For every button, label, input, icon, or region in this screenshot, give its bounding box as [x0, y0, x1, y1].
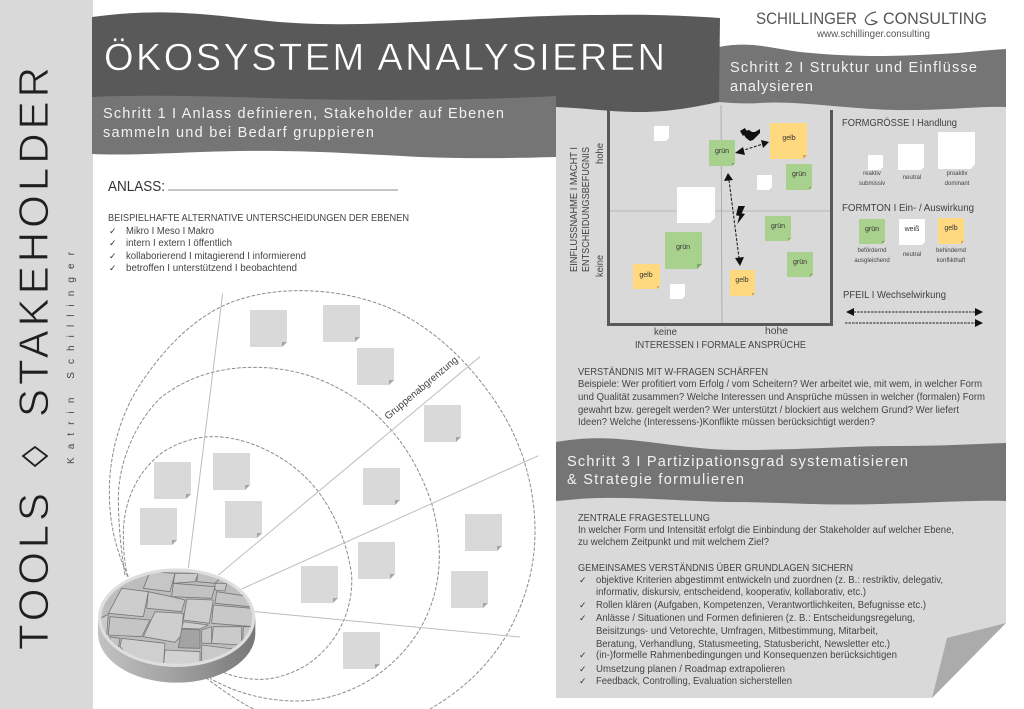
legend: arrows: PFEIL I Wechselwirkung — [843, 289, 946, 301]
legend: form size: proaktiv — [946, 171, 968, 177]
text block: common understanding checklist: Anlässe / Situationen und Formen definieren (z. B.: Entscheidungsregelung, — [596, 613, 915, 624]
heading text: Schritt 2 I Struktur und Einflüsse — [730, 60, 977, 76]
sidebar author: Katrin Schillinger — [66, 251, 77, 464]
text block: level distinctions: intern I extern I öffentlich — [126, 238, 232, 249]
text block: central question: zu welchem Zeitpunkt und mit welchem Ziel? — [578, 537, 769, 548]
chart: influence / interest matrix: grün — [715, 148, 729, 155]
chart: influence / interest matrix: grün — [793, 259, 807, 266]
legend: form colour: behindernd — [936, 248, 966, 254]
text block: level distinctions: BEISPIELHAFTE ALTERNATIVE UNTERSCHEIDUNGEN DER EBENEN — [108, 213, 409, 224]
legend: form colour: ausgleichend — [854, 258, 890, 264]
text block: central question — [578, 513, 954, 548]
text block: common understanding checklist: ✓ — [579, 665, 587, 675]
chart: influence / interest matrix: gelb — [639, 272, 653, 279]
legend: form colour: konflikthaft — [937, 258, 966, 264]
title text: ÖKOSYSTEM ANALYSIEREN — [104, 37, 665, 79]
sidebar title — [10, 67, 57, 650]
text block: common understanding checklist: Beisitzungs- und Vetorechte, Umfragen, Mitbestimmung, Mitarbeit, — [596, 626, 878, 637]
text block: level distinctions: Mikro I Meso I Makro — [126, 226, 214, 237]
legend: form size: neutral — [903, 175, 921, 181]
text block: W-Fragen: Beispiele: Wer profitiert vom Erfolg / vom Scheitern? Wer arbeitet wie, mit wem, in welcher Form — [578, 379, 982, 390]
text block: level distinctions — [108, 213, 409, 274]
text block: W-Fragen: VERSTÄNDNIS MIT W-FRAGEN SCHÄRFEN — [578, 366, 768, 378]
sidebar title: TOOLS — [10, 493, 57, 650]
heading text: Schritt 3 I Partizipationsgrad systematisieren — [567, 454, 908, 470]
text block: level distinctions: ✓ — [109, 252, 117, 262]
legend: arrows — [843, 289, 983, 327]
label: group boundary: Gruppenabgrenzung — [383, 355, 460, 422]
matrix sticky notes — [654, 126, 669, 141]
text block: central question: ZENTRALE FRAGESTELLUNG — [578, 513, 710, 524]
legend: form colour — [842, 202, 974, 264]
legend: form colour: gelb — [944, 225, 958, 232]
legend: form colour: befördernd — [857, 248, 887, 254]
chart: influence / interest matrix: gelb — [735, 277, 749, 284]
text block: level distinctions: ✓ — [109, 264, 117, 274]
chart: influence / interest matrix — [569, 105, 832, 351]
panel: right grey sheet with folded corner — [556, 100, 1006, 698]
text block: W-Fragen: und Qualität zusammen? Welche Interessen und Ansprüche müssen in welcher (formalen) Form — [578, 392, 985, 403]
chart: influence / interest matrix: gelb — [782, 135, 796, 142]
text block: common understanding checklist: ✓ — [579, 677, 587, 687]
legend: form colour: neutral — [903, 252, 921, 258]
chart: influence / interest matrix: hohe — [765, 326, 788, 337]
chart: influence / interest matrix: keine — [595, 255, 606, 277]
text block: common understanding checklist: informativ, diskursiv, entscheidend, kooperativ, kollaborativ, etc.) — [596, 587, 866, 598]
text block: level distinctions: betroffen I unterstützend I beobachtend — [126, 263, 297, 274]
anlass field: ANLASS: — [108, 179, 165, 195]
text block: common understanding checklist: ✓ — [579, 601, 587, 611]
banner: Schritt 3 — [556, 438, 1006, 505]
matrix frame — [608, 108, 832, 324]
chart: influence / interest matrix: grün — [676, 244, 690, 251]
text block: central question: In welcher Form und Intensität erfolgt die Einbindung der Stakeholder auf welcher Ebene, — [578, 525, 954, 536]
text block: common understanding checklist: ✓ — [579, 576, 587, 586]
legend: form colour: FORMTON I Ein- / Auswirkung — [842, 202, 974, 214]
logo: www.schillinger.consulting — [816, 29, 930, 40]
text block: common understanding checklist: ✓ — [579, 651, 587, 661]
legend: form colour: grün — [865, 226, 879, 233]
text block: common understanding checklist: objektive Kriterien abgestimmt entwickeln und zuordnen (z. B.: restriktiv, delegativ, — [596, 575, 943, 586]
icon: lightning — [736, 206, 745, 224]
text block: common understanding checklist: (in-)formelle Rahmenbedingungen und Konsequenzen berücksichtigen — [596, 650, 897, 661]
logo: CONSULTING — [883, 10, 987, 28]
chart: influence / interest matrix: grün — [771, 223, 785, 230]
legend: form size: FORMGRÖSSE I Handlung — [842, 117, 957, 129]
banner: Schritt 1 — [92, 96, 556, 158]
panel: left sidebar — [0, 0, 93, 709]
y axis labels: EINFLUSSNAHME I MACHT I — [569, 147, 580, 272]
legend: form size: submissiv — [859, 181, 885, 187]
icon: stone disc — [98, 568, 255, 683]
banner: Schritt 1: sammeln und bei Bedarf gruppieren — [103, 125, 374, 141]
logo — [756, 10, 987, 40]
text block: level distinctions: ✓ — [109, 239, 117, 249]
legend: form size: reaktiv — [863, 171, 881, 177]
text block: W-Fragen: Ideen? Welche (Interessens-)Konflikte müssen berücksichtigt werden? — [578, 417, 875, 428]
folded page corner — [932, 623, 1006, 698]
banner: Schritt 2 — [719, 45, 1006, 110]
banner: Schritt 2: analysieren — [730, 79, 813, 95]
icon: handshake — [740, 128, 760, 141]
text block: W-Fragen: gewahrt bzw. geregelt werden? Wer unterstützt / blockiert aus welchem Grund? Wer liefert — [578, 405, 959, 416]
chart: influence / interest matrix: grün — [792, 171, 806, 178]
chart: influence / interest matrix: INTERESSEN I FORMALE ANSPRÜCHE — [635, 339, 806, 351]
legend: form size — [842, 117, 975, 187]
text block: level distinctions: ✓ — [109, 227, 117, 237]
arrows — [741, 144, 763, 151]
logo: SCHILLINGER — [756, 10, 857, 28]
heading text: Schritt 1 I Anlass definieren, Stakeholder auf Ebenen — [103, 106, 504, 122]
banner: main title — [92, 12, 720, 112]
chart: influence / interest matrix: ENTSCHEIDUNGSBEFUGNIS — [581, 147, 592, 272]
text block: common understanding checklist — [578, 562, 943, 687]
text block: common understanding checklist: Umsetzung planen / Roadmap extrapolieren — [596, 664, 785, 675]
banner: Schritt 3: & Strategie formulieren — [567, 472, 744, 488]
text block: W-Fragen — [578, 366, 985, 428]
x axis labels: keine — [654, 327, 677, 338]
icon: diamond separator — [23, 447, 47, 466]
text block: common understanding checklist: GEMEINSAMES VERSTÄNDNIS ÜBER GRUNDLAGEN SICHERN — [578, 562, 853, 574]
sidebar title: STAKEHOLDER — [10, 67, 57, 417]
text block: common understanding checklist: ✓ — [579, 614, 587, 624]
text block: level distinctions: kollaborierend I mitagierend I informierend — [126, 251, 306, 262]
sticky notes: stakeholder placeholders — [140, 305, 502, 669]
chart: stakeholder ecosystem circles — [109, 291, 538, 709]
text block: common understanding checklist: Feedback, Controlling, Evaluation sicherstellen — [596, 676, 792, 687]
chart: influence / interest matrix: hohe — [595, 143, 606, 164]
text block: common understanding checklist: Beratung, Verhandlung, Statusmeeting, Statusbericht, Newsletter etc.) — [596, 639, 890, 650]
legend: form colour: weiß — [904, 226, 919, 233]
legend: form size: dominant — [945, 181, 970, 187]
text block: common understanding checklist: Rollen klären (Aufgaben, Kompetenzen, Verantwortlichkeiten, Befugnisse etc.) — [596, 600, 926, 611]
